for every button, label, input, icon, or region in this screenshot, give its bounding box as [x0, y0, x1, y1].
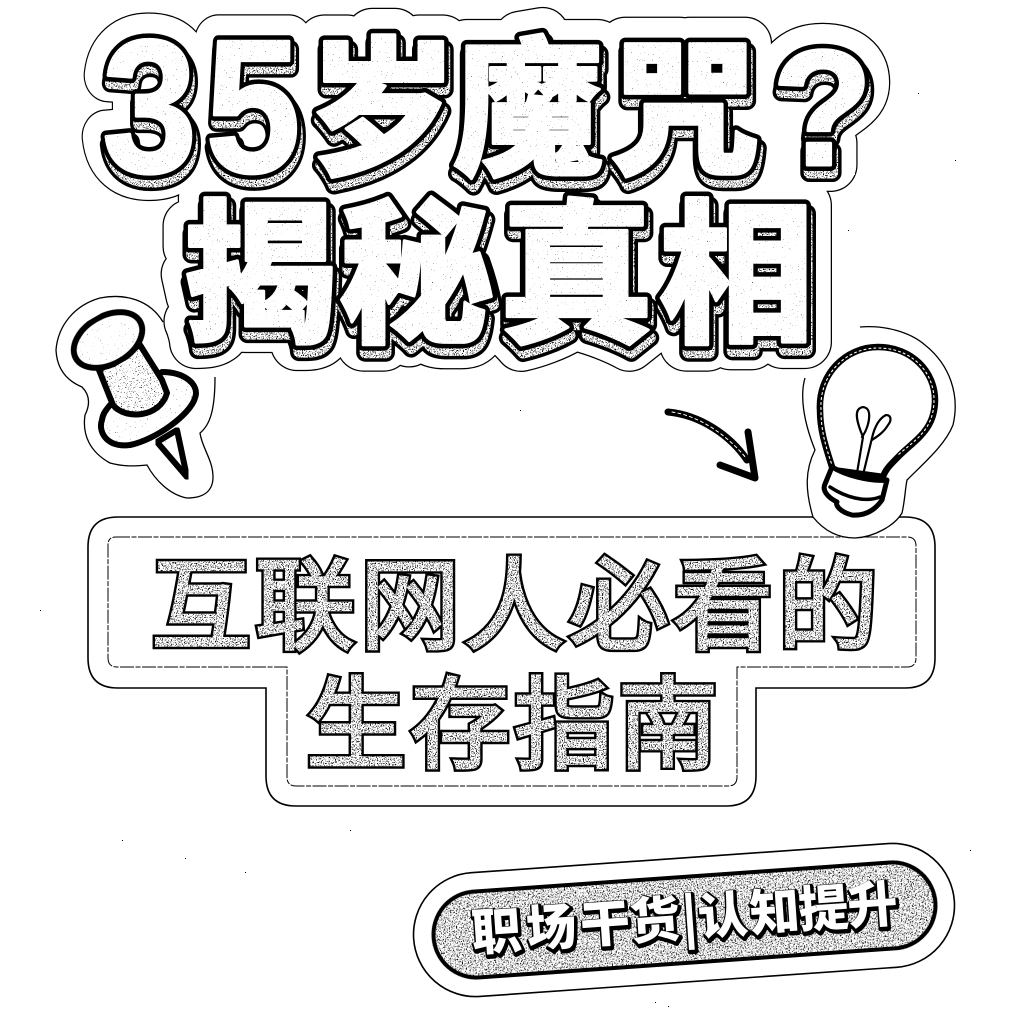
title extrusion shadow: ? — [774, 24, 875, 208]
sticker outline: light bulb — [803, 327, 955, 538]
arrow — [668, 412, 755, 478]
subtitle text: 互联网人必看的 生存指南 — [151, 525, 878, 789]
title white faces — [102, 0, 873, 375]
title black outline: 揭秘真相 — [182, 150, 814, 375]
bulb glass — [820, 347, 935, 477]
sticker outline: main title — [102, 0, 873, 375]
title extrusion shadow: 岁魔咒 — [310, 0, 762, 215]
badge stippled fill — [431, 860, 938, 980]
bulb socket — [824, 467, 887, 515]
title extrusion shadow: 岁魔咒 — [310, 0, 762, 215]
title extrusion shadow: 35 — [104, 9, 303, 221]
sticker outline: main title: 揭秘真相 — [182, 150, 814, 375]
icon: light bulb — [820, 347, 935, 515]
sticker outline: main title: 35 — [102, 1, 301, 213]
panel inner dashed outline — [108, 537, 916, 786]
pin needle — [157, 430, 187, 477]
title black outline: 35 — [102, 1, 301, 213]
subtitle text: 互联网人必看的 生存指南: 互联网人必看的 — [151, 525, 878, 670]
title white faces: ? — [772, 16, 873, 200]
icon: pushpin — [64, 301, 196, 477]
badge: 职场干货 | 认知提升 — [409, 839, 959, 1001]
title white faces: 揭秘真相 — [182, 150, 814, 375]
title extrusion shadow: 揭秘真相 — [184, 158, 816, 383]
panel: subtitle badge — [88, 517, 935, 806]
badge outer outline — [409, 839, 959, 1001]
title extrusion shadow: 35 — [104, 9, 303, 221]
socket thread — [830, 487, 880, 499]
title extrusion shadow — [104, 0, 875, 383]
bulb glass highlight — [821, 348, 934, 468]
sticker outline: pushpin — [56, 296, 215, 498]
pin head — [64, 301, 152, 379]
title black outline — [102, 0, 873, 375]
badge text: 职场干货|认知提升 — [469, 864, 900, 966]
panel outer outline — [88, 517, 935, 806]
sticker outline: main title: 揭秘真相 — [182, 150, 814, 375]
sticker fill: light bulb — [803, 327, 955, 538]
subtitle text: 互联网人必看的 生存指南: 生存指南 — [306, 644, 718, 789]
sticker outline: main title: ? — [772, 16, 873, 200]
badge text: 职场干货|认知提升 — [470, 866, 901, 968]
title white faces: 35 — [102, 1, 301, 213]
subtitle text: 互联网人必看的 生存指南: 互联网人必看的 — [151, 525, 878, 670]
title extrusion shadow: 揭秘真相 — [184, 158, 816, 383]
pin body — [99, 345, 167, 414]
bulb filaments — [857, 407, 890, 475]
title black outline: ? — [772, 16, 873, 200]
main title: 35岁魔咒？ 揭秘真相 — [102, 0, 875, 383]
subtitle text: 互联网人必看的 生存指南: 生存指南 — [306, 644, 718, 789]
title extrusion shadow: ? — [774, 24, 875, 208]
sticker outline: main title: 35 — [102, 1, 301, 213]
sticker outline: main title: ? — [772, 16, 873, 200]
pin disc — [101, 372, 196, 445]
